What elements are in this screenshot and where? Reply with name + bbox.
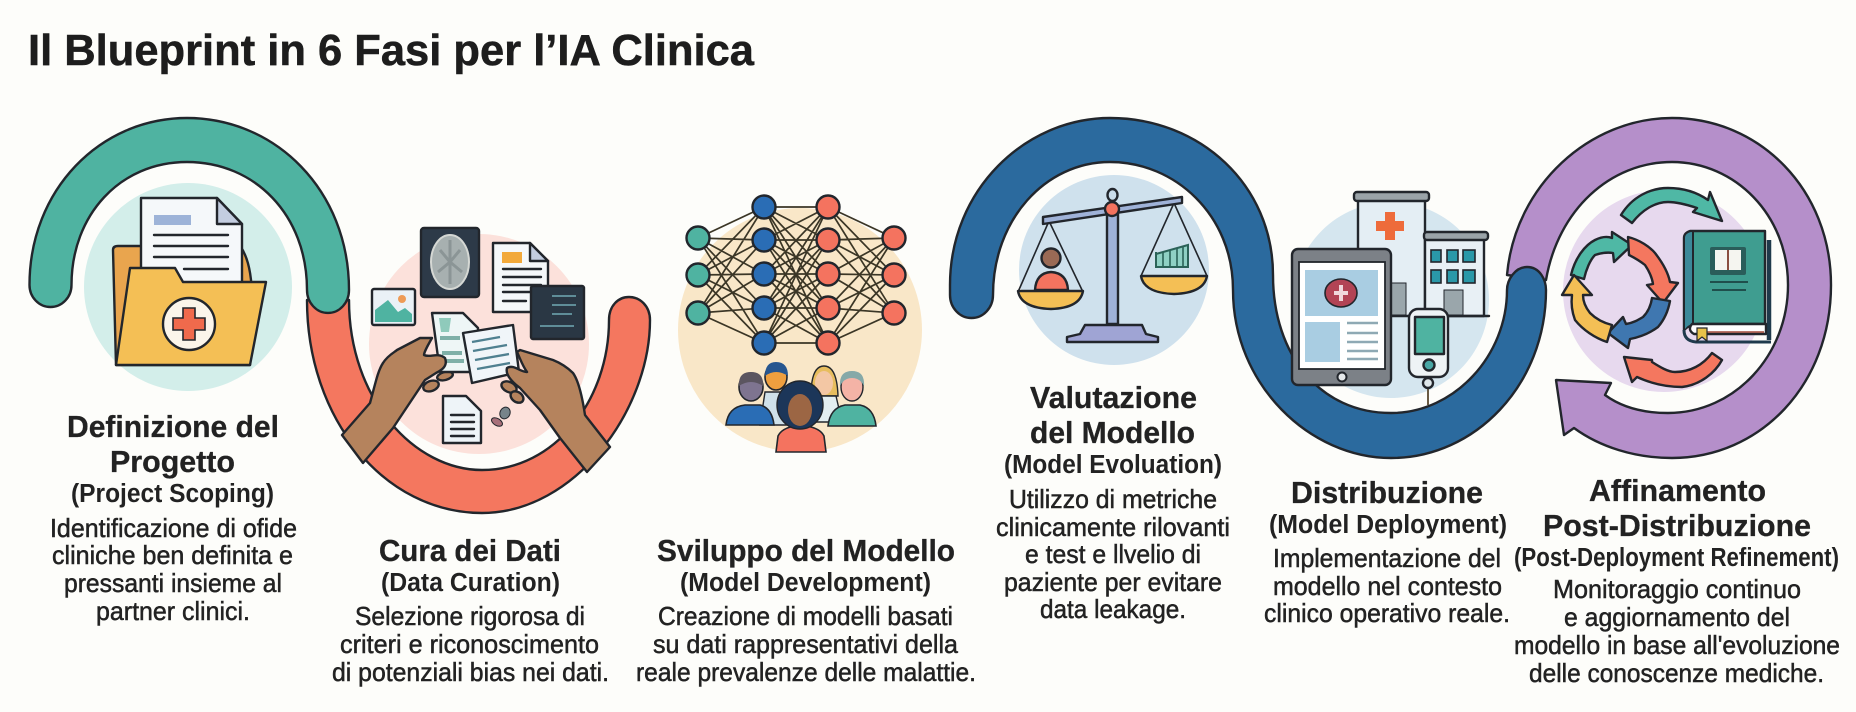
ribbon: teal curve bbox=[30, 118, 349, 313]
text: step 5: modello nel contesto bbox=[1273, 571, 1502, 601]
text: step 4: e test e llvelio di bbox=[1025, 539, 1201, 569]
icon: right hand bbox=[507, 350, 610, 472]
icon: held sheet one bbox=[432, 313, 478, 372]
icon: hands sorting records bbox=[342, 228, 610, 472]
team of people bbox=[726, 362, 876, 452]
panel: step 2 data curation bbox=[332, 228, 610, 687]
text: step 1: cliniche ben definita e bbox=[52, 540, 293, 570]
icon: bar chart on pan bbox=[1141, 245, 1207, 294]
icon: handheld device bbox=[1409, 309, 1448, 405]
text: step 4: Valutazione bbox=[1030, 380, 1197, 415]
arrow: outer coral bbox=[1624, 353, 1722, 387]
network nodes bbox=[686, 196, 906, 354]
text: step 5: clinico operativo reale. bbox=[1264, 598, 1510, 628]
icon: feedback cycle and book bbox=[1562, 188, 1771, 392]
icon: tablet bbox=[1292, 249, 1391, 385]
text: step 4: paziente per evitare bbox=[1004, 567, 1222, 597]
arrow: ring blue bbox=[1608, 298, 1670, 348]
text: step 1: pressanti insieme al bbox=[64, 568, 282, 598]
panel: step 4 model evaluation bbox=[996, 175, 1230, 624]
ribbon: coral curve bbox=[307, 297, 650, 513]
text: step 4: data leakage. bbox=[1040, 594, 1186, 624]
text: step 1: Identificazione di ofide bbox=[50, 513, 297, 543]
title: Il Blueprint in 6 Fasi per l’IA Clinica bbox=[28, 26, 755, 75]
icon: folder with document bbox=[84, 183, 292, 391]
text: step 4 bbox=[996, 380, 1230, 624]
text: step 3: reale prevalenze delle malattie. bbox=[636, 657, 976, 687]
text: step 2: Cura dei Dati bbox=[379, 533, 561, 568]
arrow: ring yellow bbox=[1562, 275, 1612, 342]
ribbon: purple loop arrow bbox=[1507, 118, 1831, 458]
text: step 3: su dati rappresentativi della bbox=[653, 629, 959, 659]
icon: bottom document and pills bbox=[443, 396, 512, 443]
text: step 2: criteri e riconoscimento bbox=[340, 629, 599, 659]
icon: code screen bbox=[531, 286, 584, 339]
arrow: outer teal bbox=[1621, 188, 1722, 223]
text: step 1 bbox=[50, 409, 297, 626]
text: step 5: (Model Deployment) bbox=[1269, 511, 1507, 539]
text: step 1: Progetto bbox=[110, 444, 235, 479]
arrow: ring teal bbox=[1571, 232, 1632, 279]
text: step 6: delle conoscenze mediche. bbox=[1529, 658, 1824, 688]
panel: step 5 model deployment bbox=[1264, 192, 1510, 628]
arrow: ring coral bbox=[1628, 237, 1678, 303]
icon: brain scan bbox=[421, 228, 479, 297]
icon: held sheet two bbox=[463, 325, 519, 383]
text: step 2 bbox=[332, 533, 609, 687]
icon: book bbox=[1684, 231, 1771, 342]
text: step 1: (Project Scoping) bbox=[71, 480, 274, 508]
network connections bbox=[698, 207, 894, 343]
text: step 6: Monitoraggio continuo bbox=[1553, 574, 1801, 604]
text: step 4: Utilizzo di metriche bbox=[1009, 484, 1217, 514]
text: step 6 bbox=[1514, 473, 1840, 688]
text: step 3: Creazione di modelli basati bbox=[658, 601, 953, 631]
text: step 3 bbox=[636, 533, 976, 687]
icon: picture card bbox=[372, 289, 415, 325]
icon: balance scale bbox=[1018, 175, 1209, 365]
text: step 1: Definizione del bbox=[67, 409, 279, 444]
icon: fingers under sheets bbox=[422, 370, 526, 405]
text: step 6: modello in base all'evoluzione bbox=[1514, 630, 1840, 660]
text: step 6: e aggiornamento del bbox=[1564, 602, 1790, 632]
text: step 5: Distribuzione bbox=[1291, 475, 1483, 510]
icon: left hand bbox=[342, 338, 446, 463]
icon: hospital, tablet and device bbox=[1292, 192, 1489, 405]
text: step 2: di potenziali bias nei dati. bbox=[332, 657, 609, 687]
text: step 1: partner clinici. bbox=[96, 596, 250, 626]
text: step 5 bbox=[1264, 475, 1510, 628]
text: step 3: (Model Development) bbox=[680, 569, 931, 597]
panel: step 3 model development bbox=[636, 196, 976, 687]
text: step 4: del Modello bbox=[1030, 415, 1195, 450]
icon: person on pan bbox=[1018, 248, 1083, 309]
icon: neural network and team bbox=[678, 196, 922, 452]
icon: report document bbox=[493, 243, 548, 312]
text: step 2: Selezione rigorosa di bbox=[355, 601, 585, 631]
text: step 2: (Data Curation) bbox=[381, 569, 560, 597]
ribbon: blue curve bbox=[950, 118, 1546, 458]
text: step 6: Affinamento bbox=[1589, 473, 1766, 508]
text: step 6: Post-Distribuzione bbox=[1543, 508, 1811, 543]
text: step 3: Sviluppo del Modello bbox=[657, 533, 955, 568]
panel: step 1 project scoping bbox=[50, 183, 297, 626]
text: step 4: (Model Evoluation) bbox=[1004, 451, 1222, 479]
panel: step 6 post-deployment refinement bbox=[1514, 188, 1840, 688]
text: step 5: Implementazione del bbox=[1273, 543, 1501, 573]
text: step 4: clinicamente rilovanti bbox=[996, 512, 1230, 542]
icon: hospital bbox=[1354, 192, 1489, 316]
